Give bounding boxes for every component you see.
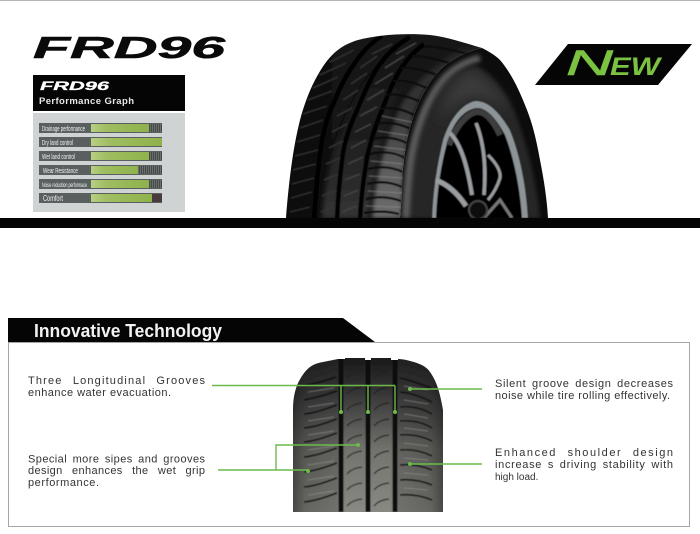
panel background bbox=[33, 113, 185, 212]
badge: NEW bbox=[535, 44, 692, 85]
tire front view bbox=[290, 356, 446, 514]
panel heading bbox=[8, 318, 375, 342]
badge: NEW: EW bbox=[610, 53, 663, 81]
panel frame bbox=[8, 342, 690, 526]
center rib sipes bbox=[347, 372, 362, 506]
callout: enhanced shoulder: high load. bbox=[495, 472, 538, 483]
wheel spokes bbox=[435, 123, 512, 220]
callout: longitudinal grooves: Three Longitudinal Grooves bbox=[28, 375, 206, 387]
callout: sipes and grooves: performance. bbox=[28, 477, 99, 489]
bar: Wet land control bbox=[39, 151, 162, 161]
callout: sipes and grooves: Special more sipes and grooves bbox=[28, 454, 206, 466]
bar: Comfort bbox=[39, 193, 162, 203]
badge: NEW: N bbox=[566, 44, 614, 83]
callout: longitudinal grooves bbox=[28, 375, 397, 414]
panel heading: Innovative Technology bbox=[34, 320, 223, 341]
callout: enhanced shoulder bbox=[408, 447, 673, 483]
tread grooves bbox=[341, 356, 395, 512]
title: FRD96: FRD96 bbox=[33, 30, 226, 65]
callout: silent groove bbox=[408, 378, 674, 402]
top edge line bbox=[0, 0, 700, 1]
grooves bbox=[314, 36, 382, 220]
bar: Wet land control: Wet land control bbox=[42, 154, 75, 161]
bar: Drainage performance bbox=[39, 123, 162, 133]
bar: Comfort: Comfort bbox=[43, 194, 64, 203]
panel header: Performance Graph bbox=[39, 96, 134, 107]
panel: innovative technology bbox=[8, 318, 690, 526]
bar: Drainage performance: Drainage performance bbox=[42, 126, 85, 133]
callout: longitudinal grooves: enhance water evacuation. bbox=[28, 387, 171, 399]
panel header bbox=[33, 75, 185, 111]
tire tread bbox=[284, 30, 486, 220]
callout: enhanced shoulder: increase s driving stability with bbox=[495, 459, 673, 471]
panel: performance graph bbox=[33, 75, 185, 212]
left shoulder sipes bbox=[304, 377, 337, 502]
center rib sipes bbox=[321, 44, 392, 212]
right shoulder sipes bbox=[364, 46, 472, 214]
callout: sipes and grooves bbox=[28, 443, 360, 489]
bar: Dry land control: Dry land control bbox=[42, 140, 73, 147]
tire photo: angled view bbox=[284, 30, 550, 220]
callout: enhanced shoulder: Enhanced shoulder design bbox=[495, 447, 673, 459]
tread lit shoulder bbox=[372, 48, 486, 218]
callout: silent groove: Silent groove design decreases bbox=[495, 378, 674, 390]
wheel rim bbox=[432, 101, 528, 220]
panel header: FRD96 bbox=[40, 79, 110, 93]
bar: Noise reduction performance bbox=[39, 179, 162, 189]
callout: sipes and grooves: design enhances the wet grip bbox=[28, 465, 205, 477]
right shoulder sipes bbox=[400, 378, 432, 500]
bar: Wear Resistance: Wear Resistance bbox=[43, 166, 78, 175]
left shoulder sipes bbox=[290, 50, 354, 212]
bar: Wear Resistance bbox=[39, 165, 162, 175]
black divider band bbox=[0, 218, 700, 228]
tire sidewall bbox=[398, 44, 550, 220]
bar: Dry land control bbox=[39, 137, 162, 147]
callout: silent groove: noise while tire rolling effectively. bbox=[495, 390, 670, 402]
bar: Noise reduction performance: Noise reduction performace bbox=[42, 183, 87, 189]
tread lighter middle bbox=[322, 50, 440, 218]
